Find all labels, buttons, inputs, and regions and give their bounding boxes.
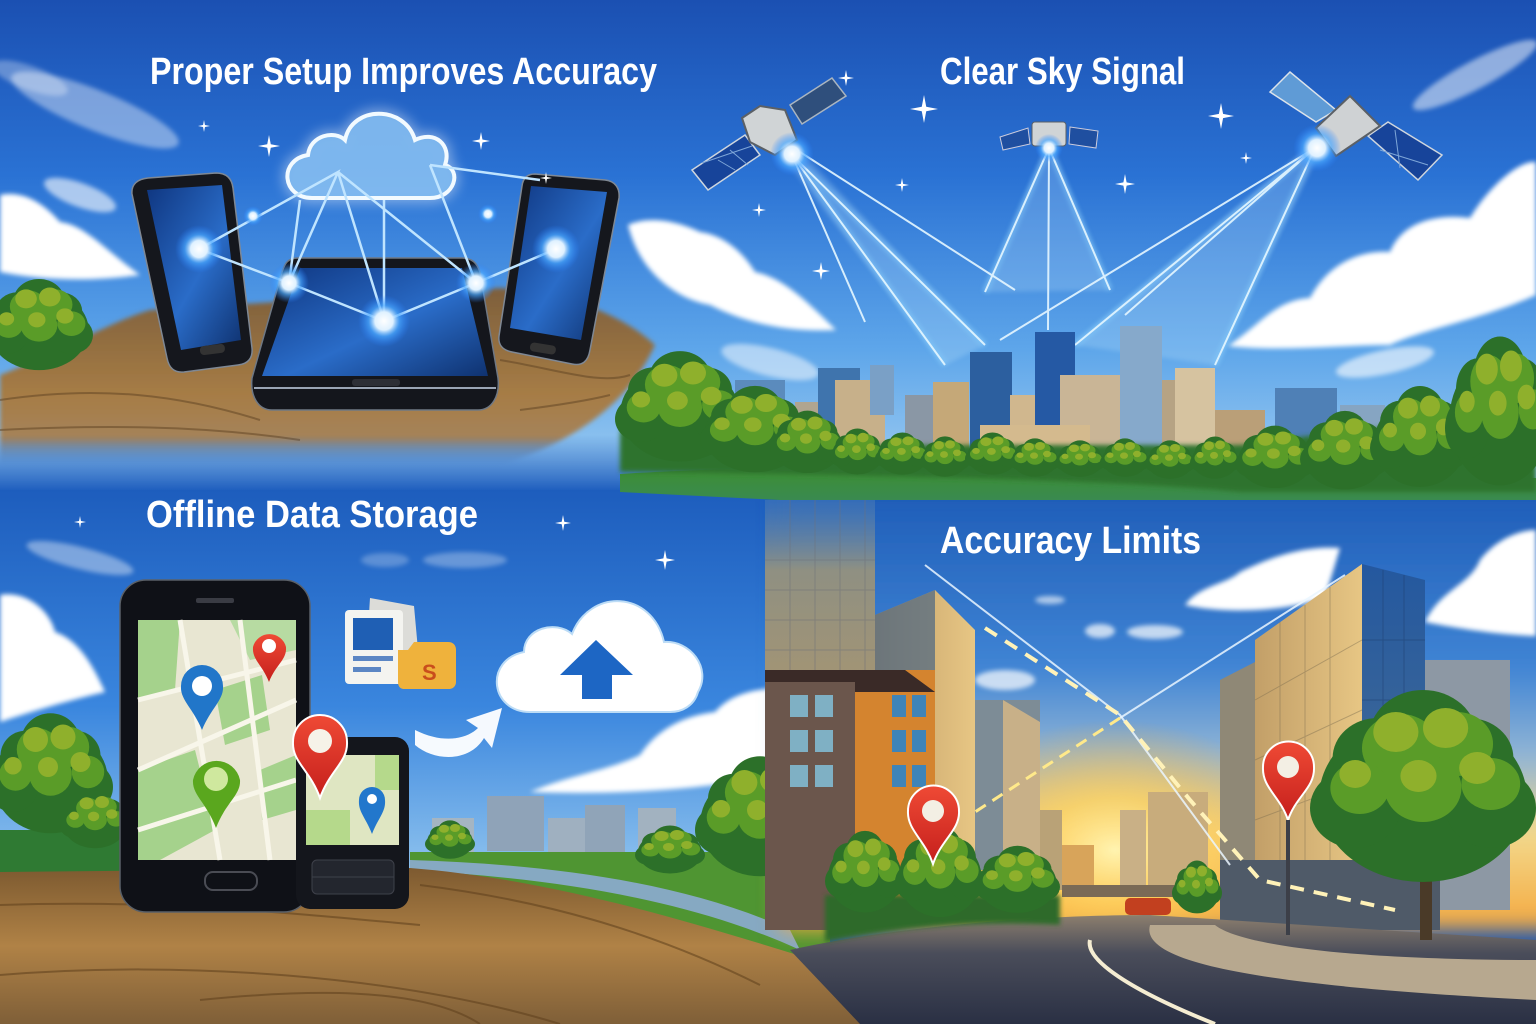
wooden table: [0, 288, 655, 465]
left phone: [132, 173, 252, 372]
data file icons: S: [422, 660, 437, 685]
map areas: [138, 620, 296, 860]
left buildings: [765, 500, 1040, 930]
sun glow: [925, 720, 1305, 980]
title: proper setup: Proper Setup Improves Accuracy: [150, 51, 657, 93]
grass strip upper right: [620, 465, 1536, 500]
trees, grass and river lower: [410, 820, 830, 1000]
large red pin: [293, 715, 347, 798]
right lower-left tree: [695, 756, 825, 876]
right buildings: [1220, 564, 1510, 930]
background: clouds upper right: [628, 30, 1536, 388]
distant buildings lower right: [1040, 792, 1208, 897]
title: offline data: Offline Data Storage: [146, 494, 478, 536]
tree left: [0, 279, 93, 370]
background: sky upper half: [0, 0, 1536, 500]
satellite beams: [785, 145, 1320, 365]
sparkle stars bottom: [74, 515, 675, 570]
trees lower right: [825, 690, 1536, 942]
signal paths: [925, 565, 1395, 910]
horizon fade into lower panel: [0, 435, 800, 491]
city skyline: [735, 326, 1385, 460]
background: sky lower left: [0, 490, 790, 970]
large phone with map: [120, 580, 310, 912]
center tablet: [252, 258, 498, 410]
right phone: [499, 174, 619, 364]
cloud network icon: [287, 114, 454, 198]
satellite right: [1270, 72, 1442, 180]
title: clear sky: Clear Sky Signal: [940, 51, 1185, 93]
network nodes: [175, 204, 580, 347]
left trees lower: [0, 713, 140, 872]
sparkle stars top: [198, 70, 1252, 280]
background: clouds upper left: [0, 53, 186, 279]
clouds lower left: [0, 534, 775, 793]
wooden table lower: [0, 868, 885, 1024]
pin right lower right: [1263, 742, 1314, 935]
road: [790, 898, 1536, 1024]
clouds lower right: [975, 530, 1536, 690]
data file icons: [345, 598, 456, 689]
panel: proper setup: [0, 114, 655, 465]
pin left lower right: [908, 786, 959, 864]
tree line upper right: [615, 337, 1536, 492]
network lines: [199, 165, 556, 321]
map pins on phone: [181, 634, 286, 828]
background: sky lower right: [780, 490, 1536, 930]
distant city lower: [432, 796, 676, 853]
satellite left: [692, 78, 846, 190]
upload cloud: [497, 601, 702, 712]
satellite center: [1000, 122, 1098, 162]
small phone: [296, 737, 409, 909]
title: accuracy limits: Accuracy Limits: [940, 520, 1201, 562]
wood grain: [0, 360, 630, 440]
curved arrow: [415, 708, 502, 757]
